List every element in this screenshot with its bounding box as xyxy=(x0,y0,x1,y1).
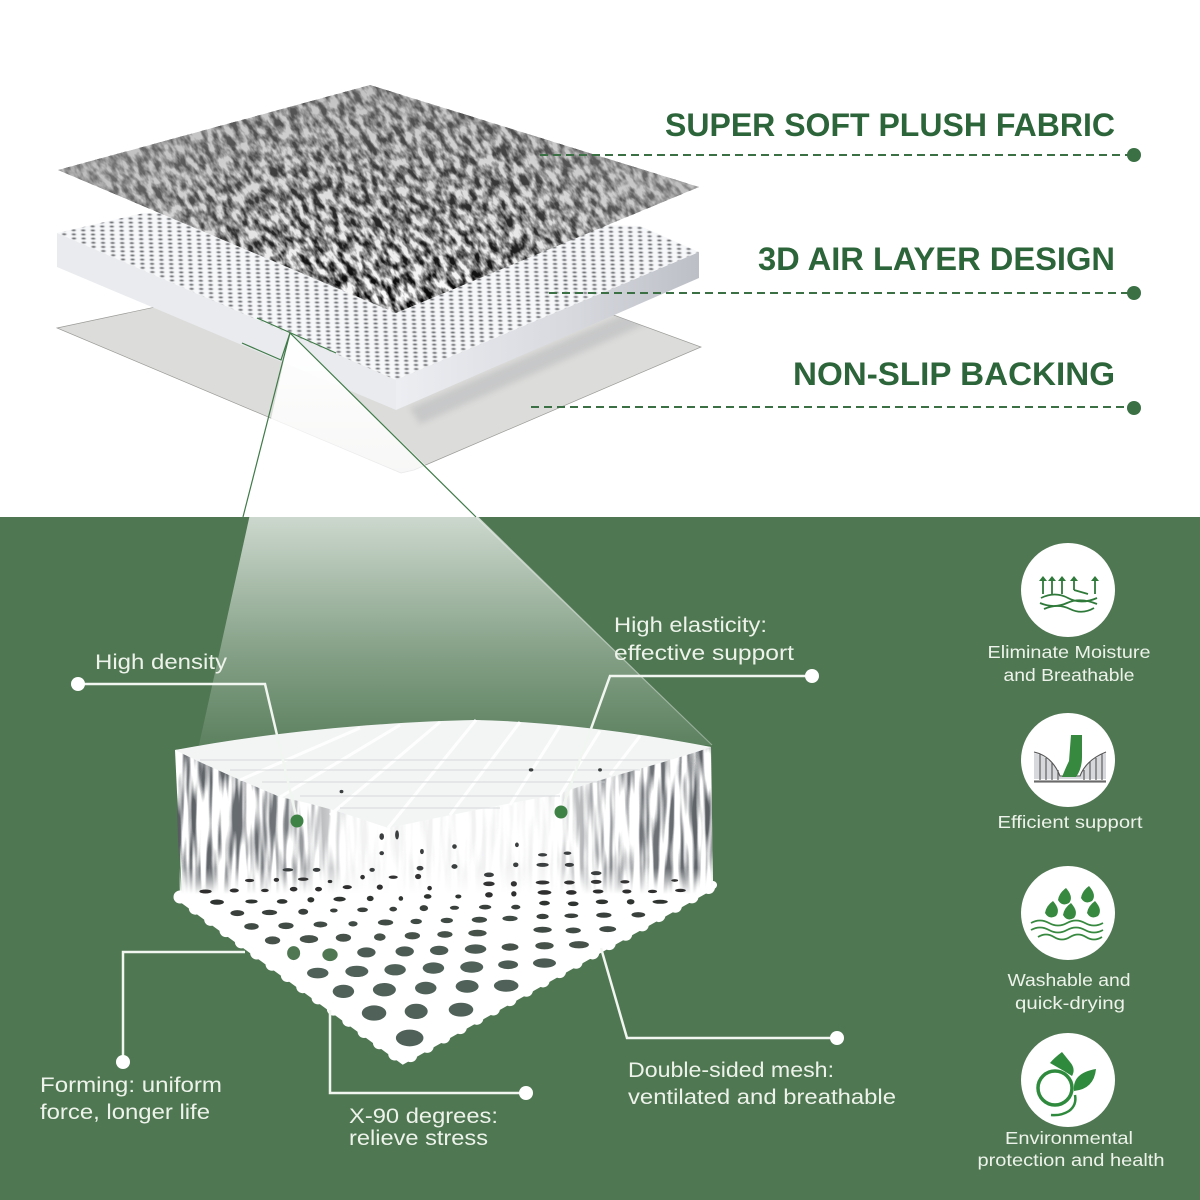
callout: double-sided mesh xyxy=(601,948,896,1109)
callout: high density: High density xyxy=(95,651,228,674)
top face ribs xyxy=(240,720,640,828)
icon: environmental protection xyxy=(1021,1033,1115,1127)
label: washable and quick-drying: Washable and xyxy=(1008,970,1130,990)
icon: efficient support xyxy=(1021,713,1115,807)
callout: forming: force, longer life xyxy=(40,1101,210,1124)
label: moisture and breathable: and Breathable xyxy=(1004,665,1134,685)
callout: high elasticity: High elasticity: xyxy=(614,614,767,637)
row y870 xyxy=(333,980,479,998)
callout: double-sided mesh: ventilated and breathable xyxy=(628,1086,896,1109)
row y570 xyxy=(199,884,686,897)
label: environmental protection: Environmental xyxy=(1005,1128,1133,1148)
row y715 xyxy=(265,930,589,951)
callout: high density xyxy=(71,651,304,828)
dashed connector: plush fabric xyxy=(540,148,1141,162)
callout: high elasticity: effective support xyxy=(614,642,794,665)
mesh perforated top xyxy=(60,213,698,380)
mesh base holes xyxy=(199,768,686,1046)
row y675 xyxy=(244,916,616,933)
upper tiny holes xyxy=(283,768,602,877)
funnel edge lines xyxy=(242,318,712,745)
layer: 3D air mesh xyxy=(50,200,710,410)
icon: moisture and breathable xyxy=(1021,543,1115,637)
dashed connector: air layer xyxy=(549,286,1141,300)
row y935 xyxy=(362,1003,473,1021)
dashed connector: backing xyxy=(531,401,1141,415)
label: washable and quick-drying xyxy=(1008,970,1130,1013)
row y540 xyxy=(245,874,678,886)
callout: x-90 degrees xyxy=(330,1010,533,1150)
heading: backing: NON-SLIP BACKING xyxy=(793,356,1115,392)
heading: plush fabric: SUPER SOFT PLUSH FABRIC xyxy=(665,107,1115,143)
wall streaks xyxy=(170,745,720,900)
mesh right side xyxy=(396,252,699,410)
top face xyxy=(175,720,711,828)
mesh left side xyxy=(57,233,396,410)
layer: non-slip backing sheet xyxy=(57,285,701,473)
panel: green bottom background xyxy=(0,517,1200,1200)
row y810 xyxy=(307,961,518,992)
callout: double-sided mesh: Double-sided mesh: xyxy=(628,1059,834,1082)
3D mesh detail block xyxy=(170,720,720,1060)
row y600 xyxy=(210,894,668,906)
label: efficient support: Efficient support xyxy=(998,812,1143,832)
callout: forming xyxy=(40,952,245,1124)
layer: plush fabric xyxy=(58,85,699,313)
tip hole xyxy=(396,1030,423,1046)
block body xyxy=(175,720,713,1058)
callout: x-90 degrees: relieve stress xyxy=(349,1127,488,1150)
icon: washable and quick-drying xyxy=(1021,866,1115,960)
light funnel from mesh to detail xyxy=(199,333,712,745)
label: washable and quick-drying: quick-drying xyxy=(1015,993,1125,1013)
label: environmental protection xyxy=(978,1128,1164,1170)
row y760 xyxy=(287,944,556,969)
callout: forming: Forming: uniform xyxy=(40,1074,222,1097)
row y630 xyxy=(230,905,645,919)
callout: x-90 degrees: X-90 degrees: xyxy=(349,1105,498,1128)
label: moisture and breathable: Eliminate Moisture xyxy=(988,642,1150,662)
heading: air layer: 3D AIR LAYER DESIGN xyxy=(758,241,1115,277)
callout: high elasticity xyxy=(554,614,819,818)
panel: white top background xyxy=(0,0,1200,517)
scalloped edge of mesh base xyxy=(180,885,713,1060)
top face grid xyxy=(200,760,670,808)
label: environmental protection: protection and health xyxy=(978,1150,1164,1170)
label: moisture and breathable xyxy=(988,642,1150,685)
